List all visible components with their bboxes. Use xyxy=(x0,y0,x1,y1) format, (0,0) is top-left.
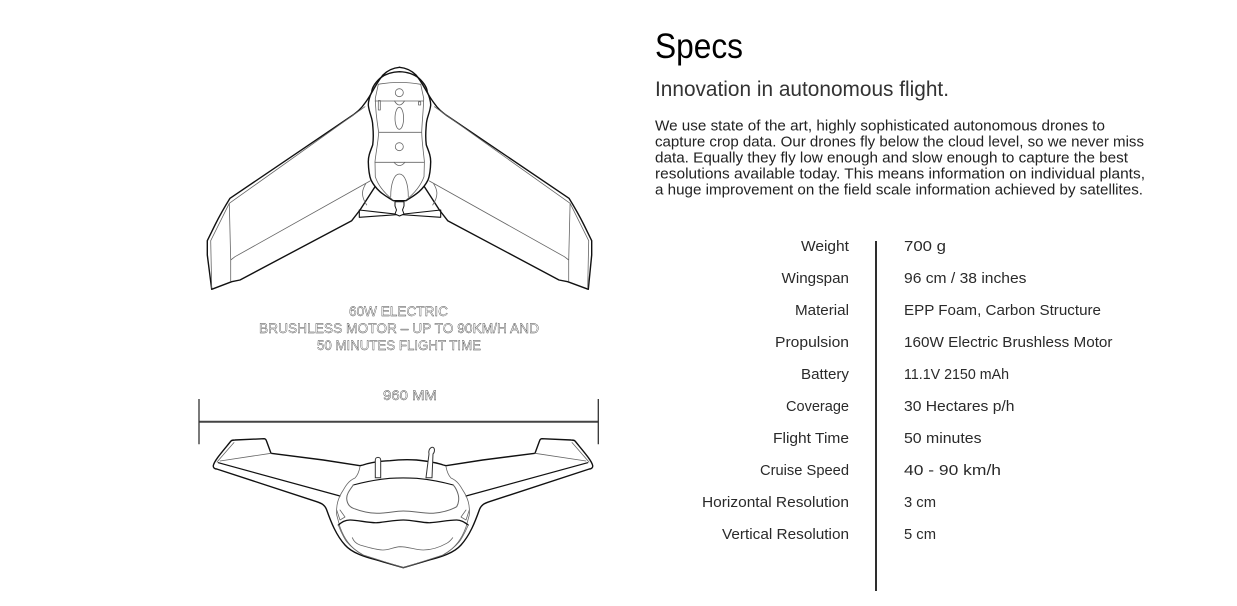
row: battery xyxy=(801,366,1009,383)
row: wingspan: 96 cm / 38 inches xyxy=(904,270,1026,287)
intro paragraph: resolutions available today. This means information on individual plants, xyxy=(655,166,1145,182)
propeller xyxy=(359,202,441,217)
row: horizontal resolution: 3 cm xyxy=(904,494,936,511)
row: battery: Battery xyxy=(801,366,849,383)
drone top view illustration xyxy=(207,67,592,289)
row: vertical resolution xyxy=(722,526,936,543)
motor caption xyxy=(259,303,539,353)
row: weight: Weight xyxy=(801,238,850,255)
row: coverage: Coverage xyxy=(786,398,849,415)
row: material xyxy=(795,302,1101,319)
antenna left xyxy=(375,457,381,478)
row: coverage: 30 Hectares p/h xyxy=(904,398,1014,415)
specs table xyxy=(702,238,1112,591)
motor caption: 60W ELECTRIC xyxy=(349,303,448,319)
motor caption: BRUSHLESS MOTOR – UP TO 90KM/H AND xyxy=(259,320,539,336)
row: flight time: Flight Time xyxy=(773,430,849,447)
intro paragraph: capture crop data. Our drones fly below the cloud level, so we never miss xyxy=(655,134,1144,150)
row: horizontal resolution: Horizontal Resolution xyxy=(702,494,849,511)
left wing details xyxy=(211,107,370,288)
row: cruise speed xyxy=(760,462,1001,479)
row: wingspan: Wingspan xyxy=(782,270,849,287)
row: flight time xyxy=(773,430,982,447)
row: weight xyxy=(801,238,946,255)
row: vertical resolution: 5 cm xyxy=(904,526,936,543)
row: material: EPP Foam, Carbon Structure xyxy=(904,302,1101,319)
row: flight time: 50 minutes xyxy=(904,430,982,447)
right wing details xyxy=(429,107,589,288)
intro paragraph: We use state of the art, highly sophisticated autonomous drones to xyxy=(655,118,1105,134)
row: vertical resolution: Vertical Resolution xyxy=(722,526,849,543)
row: propulsion xyxy=(775,334,1112,351)
row: propulsion: Propulsion xyxy=(775,334,849,351)
table divider xyxy=(875,241,877,591)
row: battery: 11.1V 2150 mAh xyxy=(904,366,1009,383)
motor caption: 50 MINUTES FLIGHT TIME xyxy=(317,337,481,353)
drone front view illustration xyxy=(213,439,593,568)
row: horizontal resolution xyxy=(702,494,936,511)
row: wingspan xyxy=(782,270,1026,287)
intro paragraph xyxy=(655,118,1145,198)
antenna right xyxy=(426,447,434,478)
row: material: Material xyxy=(795,302,849,319)
row: cruise speed: Cruise Speed xyxy=(760,462,849,479)
intro paragraph: data. Equally they fly low enough and slow enough to capture the best xyxy=(655,150,1128,166)
wingspan dimension: 960 MM xyxy=(383,387,437,403)
intro paragraph: a huge improvement on the field scale information achieved by satellites. xyxy=(655,182,1143,198)
wingspan dimension xyxy=(199,387,598,444)
row: propulsion: 160W Electric Brushless Motor xyxy=(904,334,1112,351)
row: weight: 700 g xyxy=(904,238,946,255)
row: coverage xyxy=(786,398,1014,415)
row: cruise speed: 40 - 90 km/h xyxy=(904,462,1001,479)
title: Specs xyxy=(655,27,743,66)
subtitle: Innovation in autonomous flight. xyxy=(655,78,949,101)
